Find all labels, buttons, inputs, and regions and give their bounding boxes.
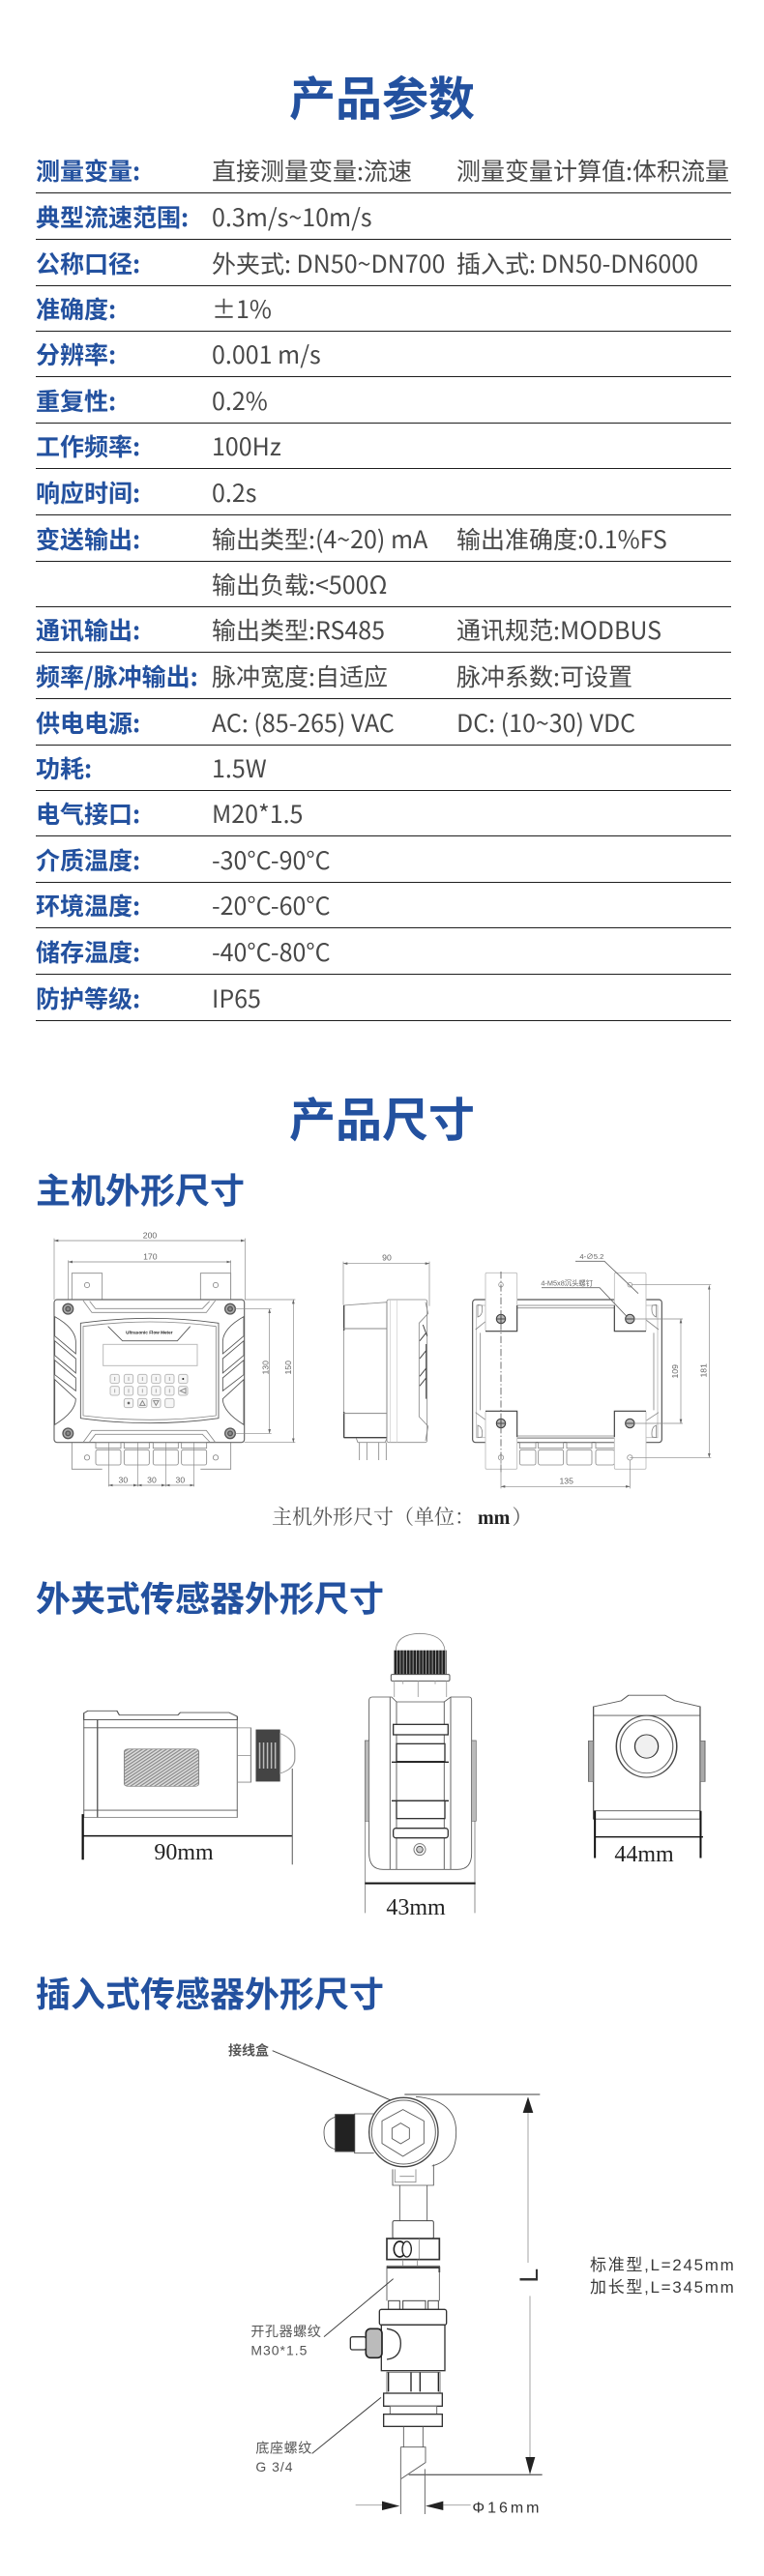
dimension 90 bbox=[343, 1253, 429, 1306]
dimensions 130 150 and 30: 30 bbox=[119, 1475, 128, 1484]
row: accuracy: 准确度: bbox=[36, 291, 116, 326]
row: nominal diameter: 外夹式: DN50~DN700 bbox=[212, 246, 445, 280]
heading: insertion sensor dimensions: 插入式传感器外形尺寸 bbox=[36, 1967, 384, 2017]
rear enclosure bbox=[473, 1300, 661, 1443]
row: transmitter output: 输出类型:(4~20) mA bbox=[212, 521, 427, 556]
row: measured variable: 测量变量: bbox=[36, 153, 140, 188]
row: power supply: 供电电源: bbox=[36, 705, 140, 740]
row: repeatability bbox=[36, 378, 731, 424]
cable gland bbox=[391, 1633, 450, 1697]
row: protection class bbox=[36, 976, 731, 1021]
row: ambient temperature: -20°C-60°C bbox=[212, 888, 331, 922]
row: measured variable bbox=[36, 148, 731, 193]
dimensions 130 150 and 30 bbox=[108, 1300, 295, 1486]
row: power supply: DC: (10~30) VDC bbox=[456, 705, 635, 740]
title: product parameters: 产品参数 bbox=[289, 61, 475, 129]
row: frequency pulse output: 脉冲宽度:自适应 bbox=[212, 659, 388, 693]
dimension 200 and 170: 170 bbox=[143, 1252, 158, 1262]
caption: host dimension unit: 主机外形尺寸（单位：mm） bbox=[272, 1506, 532, 1529]
row: working frequency: 100Hz bbox=[212, 428, 281, 463]
row: accuracy: ±1% bbox=[212, 291, 272, 326]
callouts: 4-M5x8沉头螺钉 bbox=[541, 1278, 594, 1287]
thread callouts: M30*1.5 bbox=[250, 2342, 308, 2357]
row: frequency pulse output: 脉冲系数:可设置 bbox=[456, 659, 632, 693]
gland bbox=[324, 2114, 374, 2153]
row: response time bbox=[36, 470, 731, 515]
row: communication output bbox=[36, 607, 731, 653]
row: nominal diameter bbox=[36, 241, 731, 286]
row: transmitter output: 输出准确度:0.1%FS bbox=[456, 521, 667, 556]
row: response time: 0.2s bbox=[212, 475, 256, 510]
diameter dimension bbox=[356, 2501, 543, 2517]
row: working frequency: 工作频率: bbox=[36, 428, 140, 463]
heading: host dimensions: 主机外形尺寸 bbox=[36, 1163, 245, 1214]
length dimension L bbox=[409, 2269, 544, 2474]
junction box label bbox=[228, 2041, 390, 2100]
neck and clamp block bbox=[387, 2164, 439, 2272]
label 44mm: 44mm bbox=[614, 1842, 674, 1867]
row: medium temperature: -30°C-90°C bbox=[212, 842, 331, 877]
row: power consumption: 功耗: bbox=[36, 750, 92, 785]
row: flow range: 典型流速范围: bbox=[36, 199, 189, 234]
dimensions 130 150 and 30: 130 bbox=[260, 1361, 270, 1375]
row: storage temperature: 储存温度: bbox=[36, 934, 140, 969]
label 43mm: 43mm bbox=[386, 1895, 446, 1920]
L variants text: 标准型,L=245mm bbox=[590, 2256, 735, 2274]
enclosure body: Ultrasonic Flow Meter bbox=[126, 1330, 173, 1334]
host rear view drawing bbox=[473, 1252, 711, 1488]
clamp body bbox=[365, 1697, 476, 1869]
row: storage temperature bbox=[36, 929, 731, 975]
diameter dimension: Φ16mm bbox=[472, 2501, 543, 2517]
row: ambient temperature: 环境温度: bbox=[36, 888, 140, 922]
row: resolution: 分辨率: bbox=[36, 337, 116, 371]
row: output load bbox=[36, 562, 731, 607]
dimensions 130 150 and 30: 30 bbox=[147, 1475, 157, 1484]
insertion sensor lower drawing bbox=[250, 2266, 544, 2517]
side vents bbox=[55, 1317, 75, 1424]
opener body and valve bbox=[350, 2266, 447, 2371]
row: storage temperature: -40°C-80°C bbox=[212, 934, 331, 969]
title: product dimensions: 产品尺寸 bbox=[289, 1082, 475, 1150]
row: output load: 输出负载:<500Ω bbox=[212, 567, 387, 601]
junction box label: 接线盒 bbox=[228, 2041, 269, 2061]
row: communication output: 输出类型:RS485 bbox=[212, 612, 385, 647]
row: repeatability: 0.2% bbox=[212, 383, 268, 418]
row: working frequency bbox=[36, 424, 731, 469]
dimensions 181 109 135: 181 bbox=[699, 1363, 709, 1378]
row: electrical interface bbox=[36, 791, 731, 836]
row: medium temperature: 介质温度: bbox=[36, 842, 140, 877]
row: protection class: 防护等级: bbox=[36, 981, 140, 1015]
row: repeatability: 重复性: bbox=[36, 383, 116, 418]
clamp-on sensor side view bbox=[83, 1711, 295, 1864]
dimensions 130 150 and 30: 150 bbox=[283, 1361, 293, 1375]
row: resolution: 0.001 m/s bbox=[212, 337, 321, 371]
row: ambient temperature bbox=[36, 883, 731, 928]
clamp-on sensor front view bbox=[365, 1633, 476, 1913]
callouts: 4-∅5.2 bbox=[579, 1252, 603, 1261]
heading: clamp-on sensor dimensions: 外夹式传感器外形尺寸 bbox=[36, 1571, 384, 1622]
row: frequency pulse output bbox=[36, 654, 731, 699]
dimensions 130 150 and 30: 30 bbox=[176, 1475, 185, 1484]
dimensions 181 109 135 bbox=[501, 1285, 711, 1488]
thread callouts bbox=[250, 2279, 394, 2474]
glands bbox=[519, 1443, 614, 1465]
row: medium temperature bbox=[36, 837, 731, 883]
dimension 200 and 170: 200 bbox=[143, 1230, 157, 1240]
thread callouts: 开孔器螺纹 bbox=[250, 2324, 322, 2339]
row: electrical interface: 电气接口: bbox=[36, 796, 140, 831]
L variants text bbox=[590, 2256, 735, 2297]
thread callouts: 底座螺纹 bbox=[255, 2441, 312, 2456]
base and probe bbox=[384, 2372, 442, 2514]
dimension 200 and 170 bbox=[54, 1230, 245, 1303]
junction box bbox=[369, 2096, 456, 2167]
row: accuracy bbox=[36, 286, 731, 332]
dimension 90: 90 bbox=[382, 1253, 392, 1263]
row: power consumption bbox=[36, 746, 731, 791]
row: power supply bbox=[36, 700, 731, 746]
enclosure body bbox=[54, 1300, 245, 1443]
host side view drawing bbox=[343, 1253, 429, 1460]
screws and holes bbox=[496, 1282, 634, 1460]
right side vents bbox=[222, 1317, 244, 1424]
thread callouts: G 3/4 bbox=[255, 2459, 294, 2474]
parameter table bbox=[36, 153, 731, 1021]
length dimension L: L bbox=[514, 2269, 544, 2283]
dimension 43 bbox=[365, 1821, 476, 1913]
row: nominal diameter: 插入式: DN50-DN6000 bbox=[456, 246, 698, 280]
row: power supply: AC: (85-265) VAC bbox=[212, 705, 395, 740]
top limit and arrow bbox=[404, 2094, 540, 2263]
screws bbox=[63, 1303, 235, 1439]
mounting tabs bbox=[72, 1273, 231, 1469]
row: transmitter output: 变送输出: bbox=[36, 521, 140, 556]
row: electrical interface: M20*1.5 bbox=[212, 796, 303, 831]
row: frequency pulse output: 频率/脉冲输出: bbox=[36, 659, 198, 693]
label 90mm: 90mm bbox=[154, 1840, 214, 1865]
clamp-on sensor end view bbox=[589, 1695, 705, 1859]
row: nominal diameter: 公称口径: bbox=[36, 246, 140, 280]
row: protection class: IP65 bbox=[212, 981, 261, 1015]
host front view drawing bbox=[54, 1230, 295, 1486]
dimensions 181 109 135: 109 bbox=[670, 1364, 680, 1379]
row: transmitter output bbox=[36, 516, 731, 562]
callouts bbox=[541, 1252, 638, 1317]
row: communication output: 通讯输出: bbox=[36, 612, 140, 647]
row: response time: 响应时间: bbox=[36, 475, 140, 510]
row: measured variable: 测量变量计算值:体积流量 bbox=[456, 153, 729, 188]
row: measured variable: 直接测量变量:流速 bbox=[212, 153, 412, 188]
cable glands bbox=[96, 1443, 207, 1465]
L variants text: 加长型,L=345mm bbox=[590, 2278, 735, 2297]
mounting plates bbox=[485, 1273, 646, 1469]
row: power consumption: 1.5W bbox=[212, 750, 267, 785]
row: communication output: 通讯规范:MODBUS bbox=[456, 612, 661, 647]
keypad bbox=[110, 1374, 188, 1408]
row: flow range bbox=[36, 194, 731, 240]
insertion sensor upper drawing bbox=[228, 2041, 540, 2272]
side body bbox=[343, 1300, 428, 1460]
row: flow range: 0.3m/s~10m/s bbox=[212, 199, 372, 234]
row: resolution bbox=[36, 332, 731, 377]
dimensions 181 109 135: 135 bbox=[559, 1477, 573, 1486]
